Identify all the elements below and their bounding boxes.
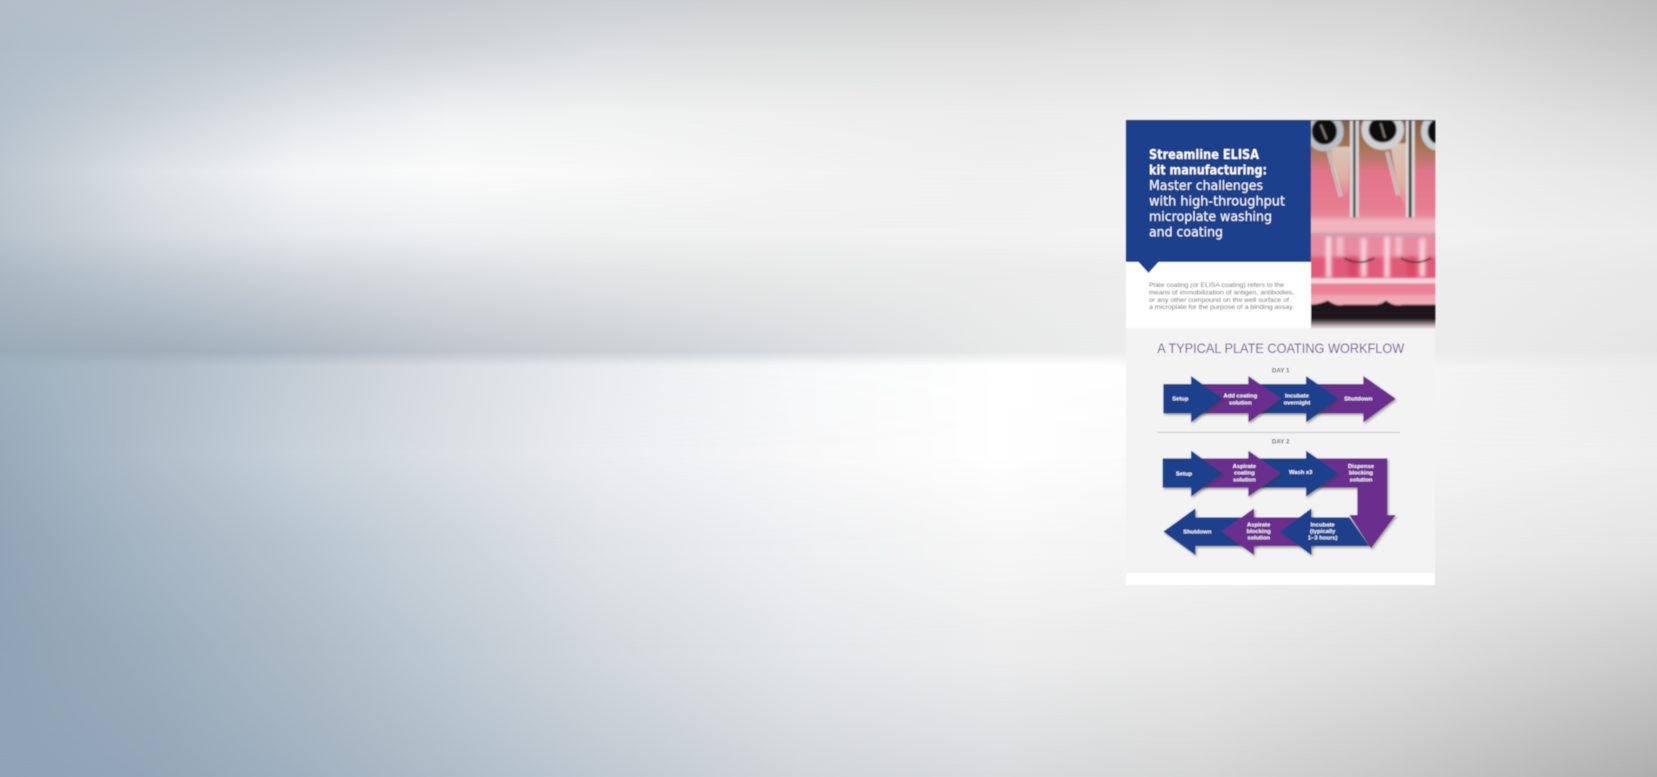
arrow: shutdown: [1163, 508, 1257, 555]
arrow labels: day 2: solution: [1247, 535, 1270, 541]
arrow labels: day 2: 1–3 hours): [1308, 535, 1337, 541]
text block: intro paragraph: a microplate for the purpose of a binding assay.: [1149, 304, 1294, 311]
image: pipetting needles over pink microplate wells: [1310, 120, 1436, 329]
arrow: incubate typically 1-3 hours: [1280, 508, 1369, 555]
arrow labels: day 2: Dispense: [1348, 464, 1375, 470]
arrow labels: day 2: [1176, 464, 1375, 541]
arrow labels: day 1: overnight: [1284, 400, 1310, 406]
arrow labels: day 2: Shutdown: [1183, 529, 1212, 535]
heading: title: kit manufacturing:: [1149, 163, 1267, 178]
arrow labels: day 1: Add coating: [1223, 394, 1258, 400]
arrow labels: day 2: Wash x3: [1289, 470, 1313, 476]
panel: workflow grey background: [1126, 328, 1435, 573]
text block: intro paragraph: [1149, 282, 1294, 311]
top edge: [1126, 120, 1435, 121]
arrow labels: day 2: Setup: [1176, 471, 1193, 477]
panel: document thumbnail: [1126, 113, 1452, 585]
heading: title: Streamline ELISA: [1149, 148, 1259, 163]
arrow: aspirate coating solution: [1197, 451, 1281, 497]
arrow labels: day 2: Aspirate: [1233, 464, 1257, 470]
arrow labels: day 2: Incubate: [1311, 522, 1335, 528]
arrow: shutdown: [1310, 376, 1396, 422]
arrow: setup: [1163, 376, 1223, 422]
arrow labels: day 2: blocking: [1247, 529, 1271, 535]
arrow labels: day 1: Setup: [1172, 397, 1189, 403]
panel: white page: [1126, 120, 1435, 585]
chart: day 2 arrow sequence: [1163, 451, 1396, 555]
heading: title: Master challenges: [1149, 179, 1263, 194]
text block: intro paragraph: or any other compound on the well surface of: [1149, 297, 1289, 304]
arrow: add coating solution: [1197, 376, 1281, 422]
arrow labels: day 2: blocking: [1349, 471, 1373, 477]
arrow labels: day 1: solution: [1229, 400, 1252, 406]
heading: title: [1149, 148, 1285, 241]
arrow labels: day 2: (typically: [1310, 529, 1336, 535]
arrow labels: day 1: [1172, 394, 1373, 406]
arrow: dispense blocking solution: [1310, 458, 1396, 548]
label: day 2: DAY 2: [1272, 439, 1290, 446]
arrow: incubate overnight: [1253, 376, 1339, 422]
text block: intro paragraph: means of immobilization of antigen, antibodies,: [1149, 289, 1294, 296]
chart: day 1 arrow sequence: [1163, 376, 1396, 422]
arrow: aspirate blocking solution: [1222, 508, 1314, 555]
arrow labels: day 1: Incubate: [1285, 394, 1310, 400]
arrow labels: day 2: solution: [1350, 477, 1373, 483]
arrow labels: day 2: coating: [1234, 471, 1255, 477]
label: day 1: DAY 1: [1272, 367, 1290, 374]
heading: workflow title: A TYPICAL PLATE COATING WORKFLOW: [1157, 341, 1404, 356]
arrow: setup: [1163, 451, 1223, 497]
heading: title: with high-throughput: [1149, 194, 1285, 210]
heading: title: and coating: [1149, 226, 1223, 241]
arrow: wash x3: [1253, 451, 1339, 497]
arrow labels: day 1: Shutdown: [1344, 397, 1373, 403]
arrow labels: day 2: Aspirate: [1247, 522, 1271, 528]
divider: [1157, 432, 1400, 433]
text block: intro paragraph: Plate coating (or ELISA coating) refers to the: [1149, 282, 1285, 289]
arrow labels: day 2: solution: [1233, 477, 1256, 483]
panel: blue title block: [1126, 120, 1311, 273]
heading: title: microplate washing: [1149, 210, 1272, 225]
